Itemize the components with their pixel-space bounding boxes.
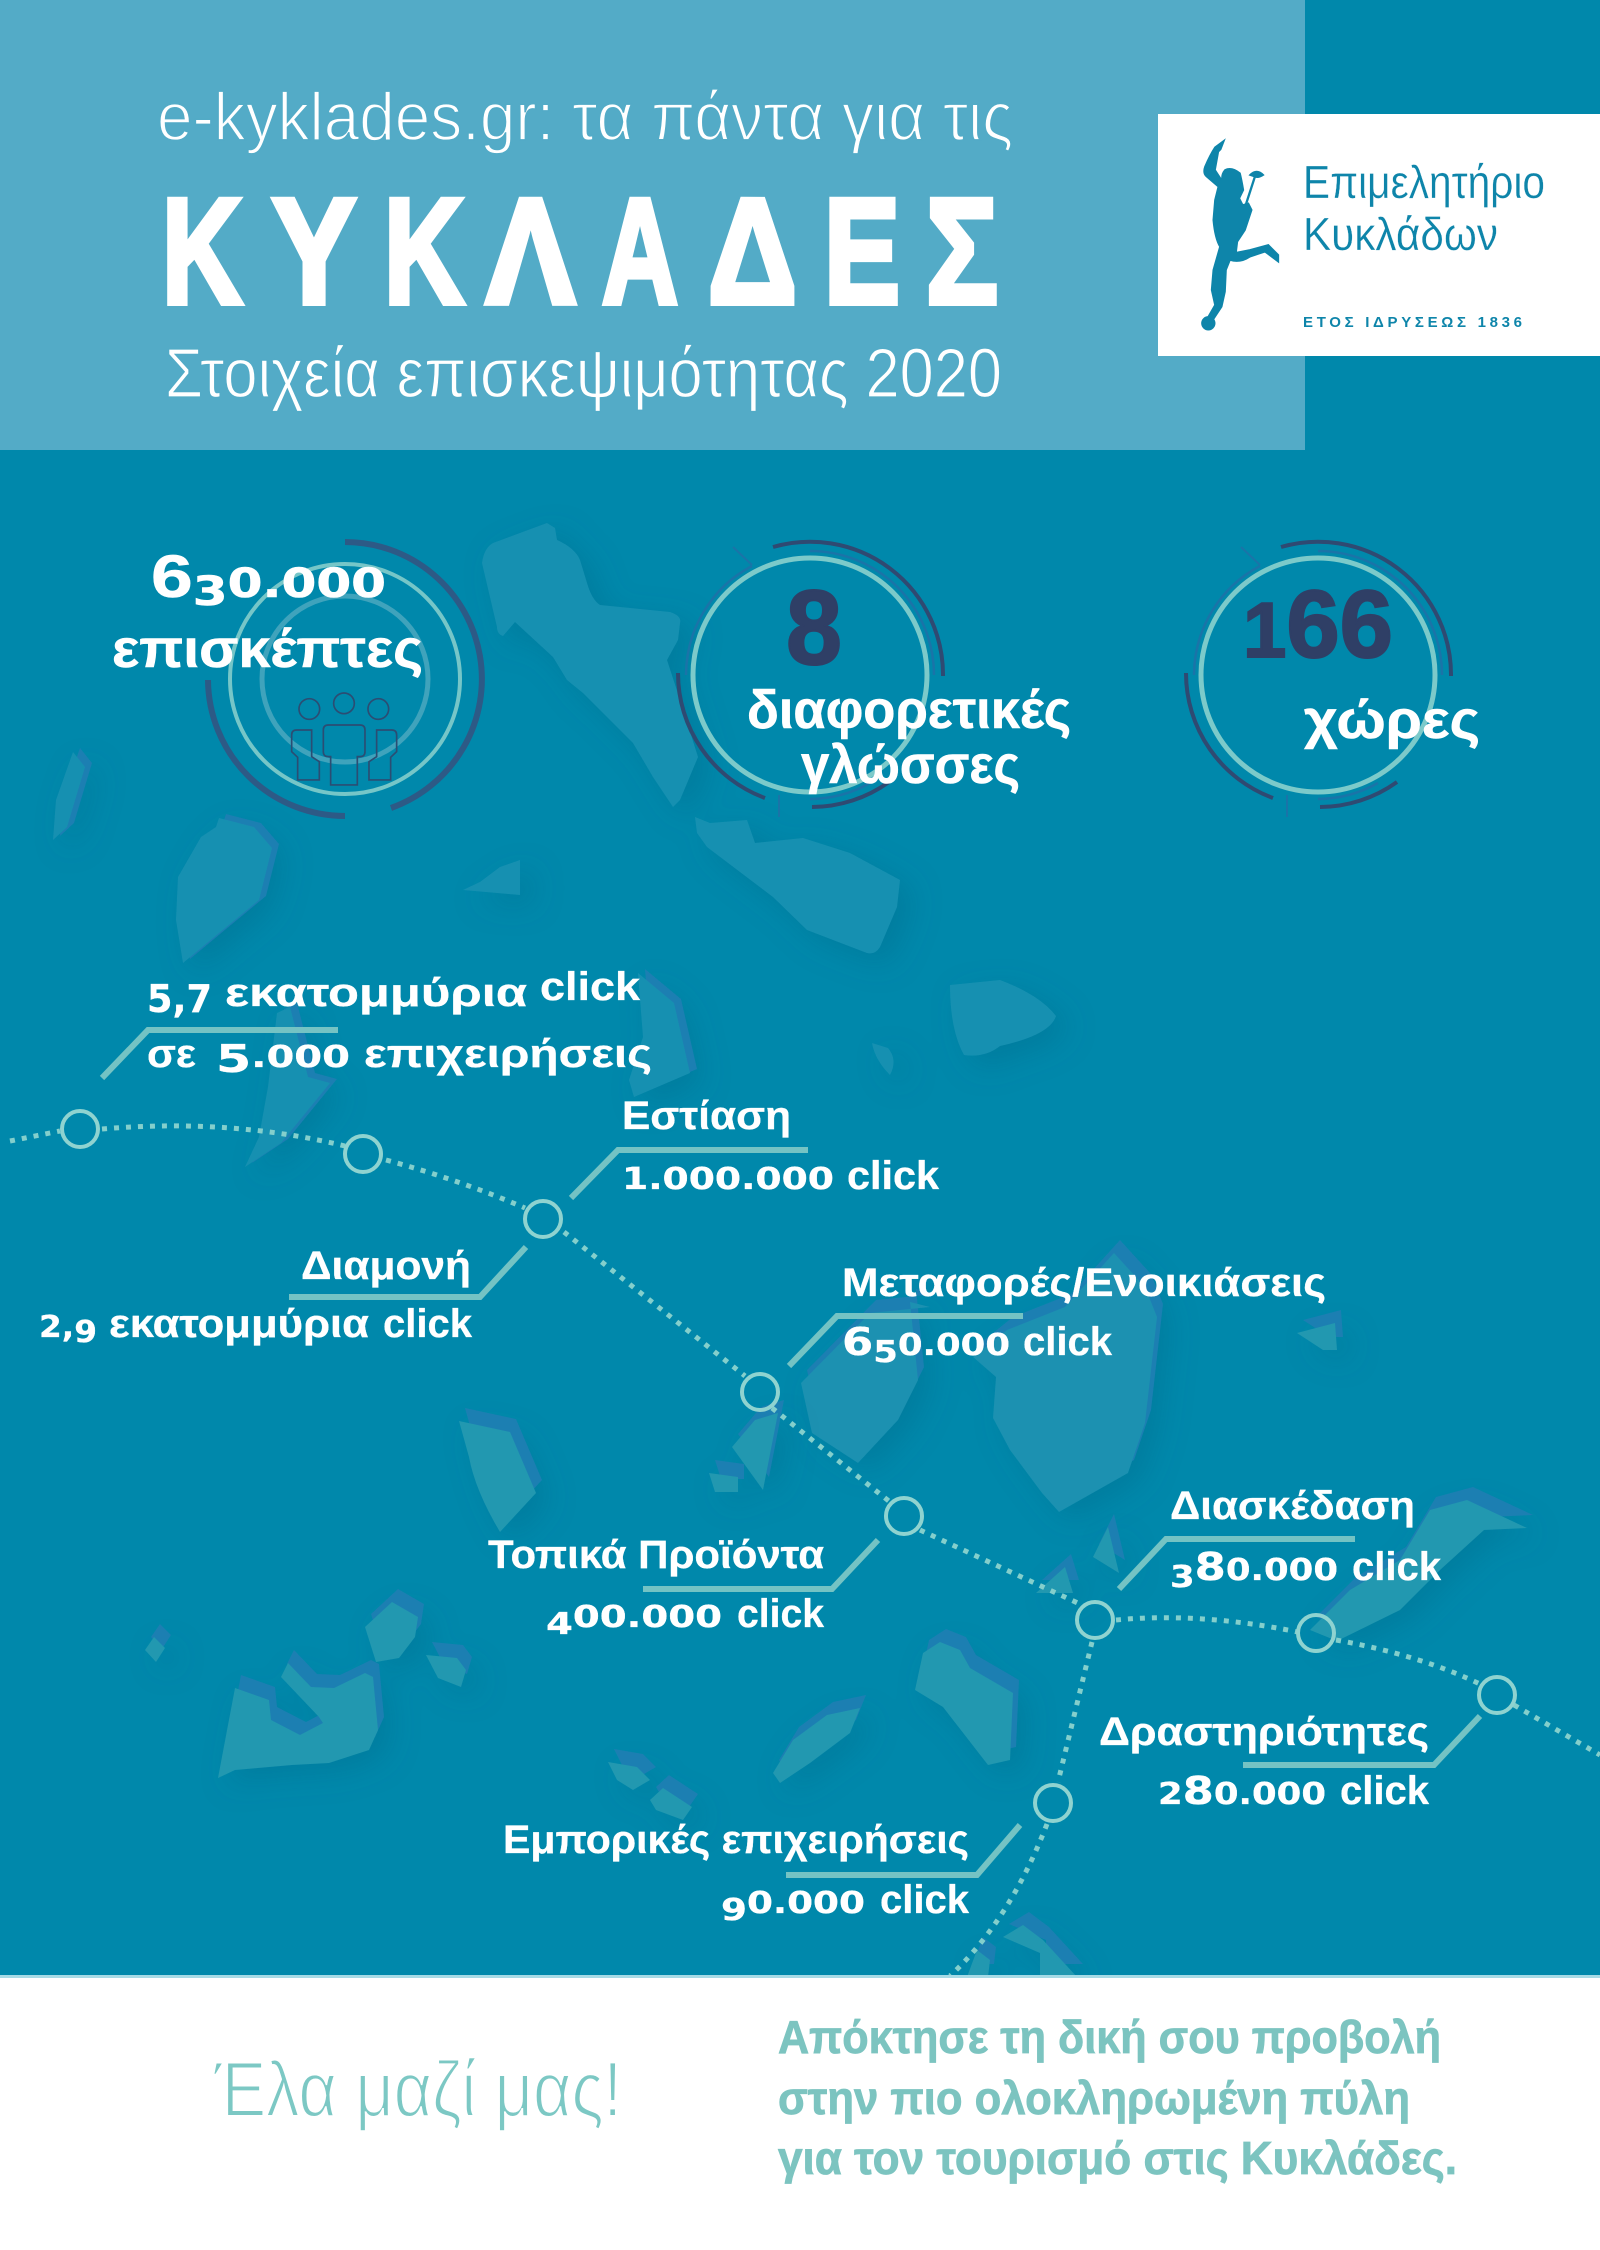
callout: Μεταφορές bbox=[789, 1261, 1326, 1370]
main title bbox=[162, 167, 998, 335]
callout: Μεταφορές: 5 bbox=[873, 1335, 898, 1370]
callout: total clicks: εκατομμύρια bbox=[225, 971, 528, 1015]
stat: languages bbox=[678, 542, 1071, 817]
subtitle: Στοιχεία επισκεψιμότητας 2020 bbox=[165, 334, 1002, 412]
main title: Λ bbox=[486, 167, 575, 335]
map: western islands bbox=[53, 752, 690, 1167]
callout: Μεταφορές: Μεταφορές/Ενοικιάσεις bbox=[842, 1261, 1326, 1305]
callout: Διαμονή: 9 bbox=[74, 1315, 97, 1350]
stat text: 0.000 bbox=[228, 561, 386, 607]
callout: Εστίαση: Εστίαση bbox=[622, 1094, 791, 1138]
callout: Εμπορικές επιχειρήσεις: click bbox=[880, 1878, 970, 1922]
callout: total clicks: 5,7 bbox=[147, 977, 212, 1021]
callout: total clicks: click bbox=[540, 965, 641, 1009]
callout: Τοπικά Προϊόντα: 00.000 bbox=[573, 1600, 722, 1635]
logo panel bbox=[1158, 114, 1600, 356]
stat text: 3 bbox=[193, 569, 228, 615]
callout: Τοπικά Προϊόντα: 4 bbox=[546, 1607, 573, 1642]
main title: Ε bbox=[824, 167, 900, 335]
callout: Τοπικά Προϊόντα: Τοπικά Προϊόντα bbox=[488, 1533, 824, 1577]
stat: visitors bbox=[112, 542, 482, 816]
logo panel: Κυκλάδων bbox=[1303, 208, 1498, 260]
map: Naxos and Paros bbox=[801, 1253, 1157, 1512]
callout: total clicks: επιχειρήσεις bbox=[364, 1032, 652, 1076]
callout: total clicks: 5 bbox=[216, 1037, 251, 1081]
callout: Δραστηριότητες bbox=[1099, 1710, 1480, 1813]
title line: e-kyklades.gr: τα πάντα για τις bbox=[157, 79, 1013, 155]
callout: Εμπορικές επιχειρήσεις: Εμπορικές επιχειρήσεις bbox=[503, 1818, 969, 1862]
callout: Εστίαση: 1.000.000 bbox=[622, 1162, 834, 1197]
footer panel: στην πιο ολοκληρωμένη πύλη bbox=[778, 2072, 1410, 2124]
callout: Διαμονή: εκατομμύρια bbox=[109, 1302, 369, 1346]
callout: Διαμονή: click bbox=[383, 1302, 473, 1346]
callout: Διασκέδαση: 8 bbox=[1195, 1545, 1226, 1589]
callout: Εμπορικές επιχειρήσεις: 0.000 bbox=[747, 1886, 865, 1921]
callout: Τοπικά Προϊόντα bbox=[488, 1533, 878, 1642]
callout: Μεταφορές: 6 bbox=[842, 1320, 873, 1364]
main title: Σ bbox=[926, 167, 998, 335]
callout: Τοπικά Προϊόντα: click bbox=[737, 1592, 825, 1636]
callout: Διασκέδαση: click bbox=[1352, 1545, 1442, 1589]
header panel bbox=[0, 0, 1305, 450]
footer call to action: Απόκτησε τη δική σου προβολή bbox=[778, 2011, 1441, 2063]
callout: Διαμονή: 2, bbox=[39, 1310, 71, 1345]
callout: Διασκέδαση: Διασκέδαση bbox=[1170, 1484, 1415, 1528]
number: 166 bbox=[1243, 571, 1393, 678]
stat text: 6 bbox=[151, 543, 193, 610]
dotted route bbox=[10, 1126, 1600, 1976]
map: Cyclades islands (south) bbox=[145, 1323, 1527, 1977]
icon: Hermes figure bbox=[1202, 141, 1278, 330]
callout: Μεταφορές: click bbox=[1023, 1320, 1113, 1364]
footer slogan: Έλα μαζί μας! bbox=[213, 2045, 622, 2133]
logo tagline: ΕΤΟΣ ΙΔΡΥΣΕΩΣ 1836 bbox=[1303, 314, 1522, 331]
caption: χώρες bbox=[1304, 690, 1480, 750]
callout: Διαμονή: Διαμονή bbox=[301, 1244, 471, 1288]
stat: languages: γλώσσες bbox=[801, 735, 1020, 795]
map: Cyclades islands (north) bbox=[463, 523, 1056, 1075]
callout: Εστίαση bbox=[571, 1094, 940, 1198]
callout: total clicks: σε bbox=[147, 1032, 196, 1076]
stat: visitors: επισκέπτες bbox=[112, 619, 423, 679]
callout: Εμπορικές επιχειρήσεις: 9 bbox=[721, 1893, 747, 1928]
main title: Υ bbox=[272, 167, 356, 335]
main title: Α bbox=[602, 167, 678, 335]
route nodes bbox=[62, 1111, 1515, 1821]
icon: people bbox=[292, 693, 397, 785]
callout: Εμπορικές επιχειρήσεις bbox=[503, 1818, 1020, 1928]
main title: Δ bbox=[708, 167, 797, 335]
callout: Διασκέδαση: 3 bbox=[1170, 1560, 1195, 1595]
callout: Δραστηριότητες: Δραστηριότητες bbox=[1099, 1710, 1429, 1754]
callout: total clicks bbox=[102, 965, 652, 1081]
number: 8 bbox=[786, 569, 842, 687]
callout: Δραστηριότητες: click bbox=[1340, 1769, 1430, 1813]
logo name: Επιμελητήριο bbox=[1303, 156, 1545, 208]
callout: Δραστηριότητες: 280.000 bbox=[1158, 1769, 1326, 1813]
callout: Μεταφορές: 0.000 bbox=[898, 1328, 1010, 1363]
footer panel bbox=[0, 1975, 1600, 2250]
caption: διαφορετικές bbox=[747, 680, 1071, 740]
callout: total clicks: .000 bbox=[251, 1040, 350, 1075]
callout: Εστίαση: click bbox=[847, 1154, 940, 1198]
callout: Διασκέδαση bbox=[1119, 1484, 1442, 1595]
callout: Διαμονή bbox=[39, 1244, 526, 1350]
main title: Κ bbox=[384, 167, 464, 335]
stat: countries bbox=[1186, 542, 1480, 817]
callout: Διασκέδαση: 0.000 bbox=[1226, 1553, 1338, 1588]
main title: Κ bbox=[162, 167, 242, 335]
footer panel: για τον τουρισμό στις Κυκλάδες. bbox=[778, 2132, 1457, 2184]
